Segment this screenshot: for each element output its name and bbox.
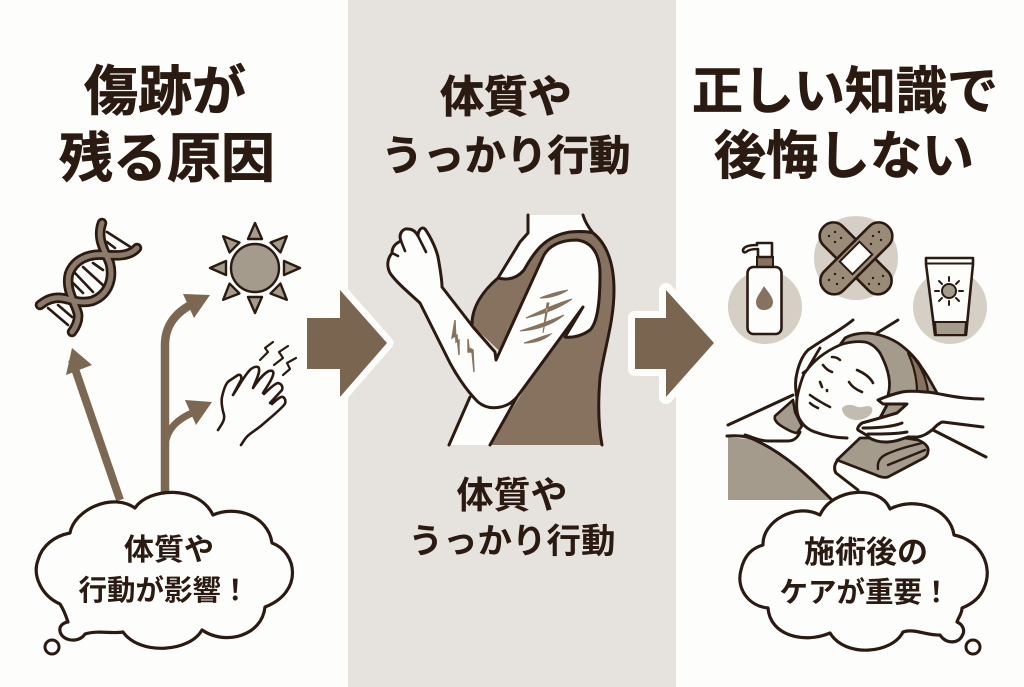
icon: DNA helix (40, 223, 137, 332)
scars: upper arm (520, 290, 572, 343)
center caption: 体質や (456, 475, 568, 516)
headband (840, 333, 937, 395)
headband dark stripe (908, 353, 928, 392)
facial features (810, 357, 873, 408)
illustration: facial care scene (727, 320, 986, 500)
small pillow (775, 400, 802, 433)
bubble text: right: ケアが重要！ (779, 576, 951, 609)
bubble text: right: 施術後の (804, 535, 928, 570)
bubble text: left: 体質や (124, 534, 214, 567)
neck (498, 215, 593, 279)
title: center column (381, 73, 631, 179)
title: center column: うっかり行動 (381, 132, 631, 179)
title: right column: 正しい知識で (692, 63, 998, 120)
title: right column (692, 63, 998, 186)
outline: torso (449, 215, 614, 445)
face outline (796, 320, 853, 438)
bubble text: left: 行動が影響！ (78, 574, 250, 607)
icon: sun (210, 223, 300, 313)
icon: crossed bandages (814, 216, 898, 300)
blanket (728, 437, 832, 500)
center caption: うっかり行動 (408, 523, 616, 561)
small thought circle: left (45, 640, 59, 654)
title: left column (59, 62, 275, 189)
tank top (472, 232, 614, 445)
body: white lower torso (449, 397, 517, 445)
icon: pump bottle (728, 243, 802, 344)
illustration: arm with scars (388, 215, 614, 445)
outline: right hand (858, 391, 986, 457)
small thought circle: right (966, 640, 980, 654)
shoulder lines (728, 395, 800, 441)
fingers (392, 236, 426, 256)
arrow: right large (635, 290, 714, 397)
icon: hand with irritation lines (218, 342, 296, 445)
icon: sunscreen tube (913, 258, 987, 344)
title: left column: 傷跡が (84, 62, 246, 122)
towel folds (878, 443, 925, 469)
title: right column: 後悔しない (714, 128, 974, 186)
center caption (408, 475, 616, 561)
towel (837, 438, 928, 477)
callout: left thought bubble (36, 492, 292, 648)
panel: center column background (348, 0, 676, 687)
therapist right hand and arm (858, 391, 983, 442)
scars: forearm (452, 320, 474, 372)
arrow: branched to sun and hand (165, 294, 212, 492)
arrow: left large (307, 290, 387, 397)
bubble text: right (779, 535, 951, 609)
callout: right thought bubble (740, 492, 987, 650)
cheek (842, 405, 872, 420)
hairline and fingers (797, 320, 898, 398)
outline: blanket (727, 436, 832, 500)
arm (388, 228, 600, 408)
title: center column: 体質や (440, 73, 572, 122)
title: left column: 残る原因 (59, 129, 275, 189)
body line (835, 461, 858, 490)
face side brown wedge (880, 405, 907, 418)
bubble text: left (78, 534, 250, 607)
arrow: straight to DNA (66, 348, 120, 500)
